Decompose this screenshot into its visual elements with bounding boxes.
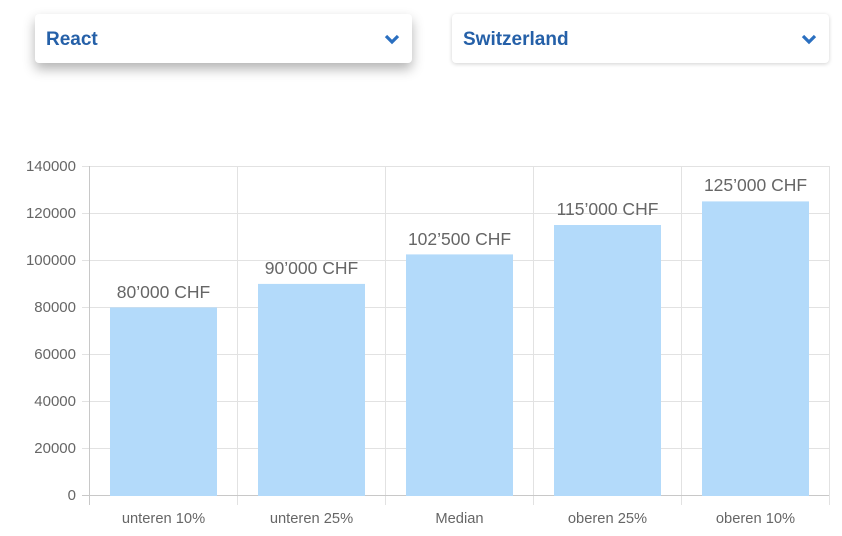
y axis labels: 20000 [34,440,76,457]
x axis labels: oberen 10% [716,511,795,527]
y axis labels: 140000 [26,158,76,175]
x axis labels [122,511,795,527]
x axis labels: Median [435,511,484,527]
y axis labels [26,158,76,504]
value labels: 115’000 CHF [557,199,658,219]
y axis labels: 80000 [34,299,76,316]
value labels: 90’000 CHF [265,258,358,278]
dropdown: technology [35,14,412,63]
x axis labels: unteren 25% [270,511,353,527]
y axis labels: 40000 [34,393,76,410]
value labels: 80’000 CHF [117,282,210,302]
x axis labels: unteren 10% [122,511,205,527]
x axis labels: oberen 25% [568,511,647,527]
y axis labels: 120000 [26,205,76,222]
dropdown: country [452,14,829,63]
dropdown: technology: React [46,29,98,50]
y axis labels: 100000 [26,252,76,269]
value labels: 125’000 CHF [704,175,807,195]
value labels: 102’500 CHF [408,229,511,249]
bars [110,201,809,496]
dropdown: country: Switzerland [463,29,569,50]
y axis labels: 0 [68,487,76,504]
y axis labels: 60000 [34,346,76,363]
value labels [117,175,807,302]
